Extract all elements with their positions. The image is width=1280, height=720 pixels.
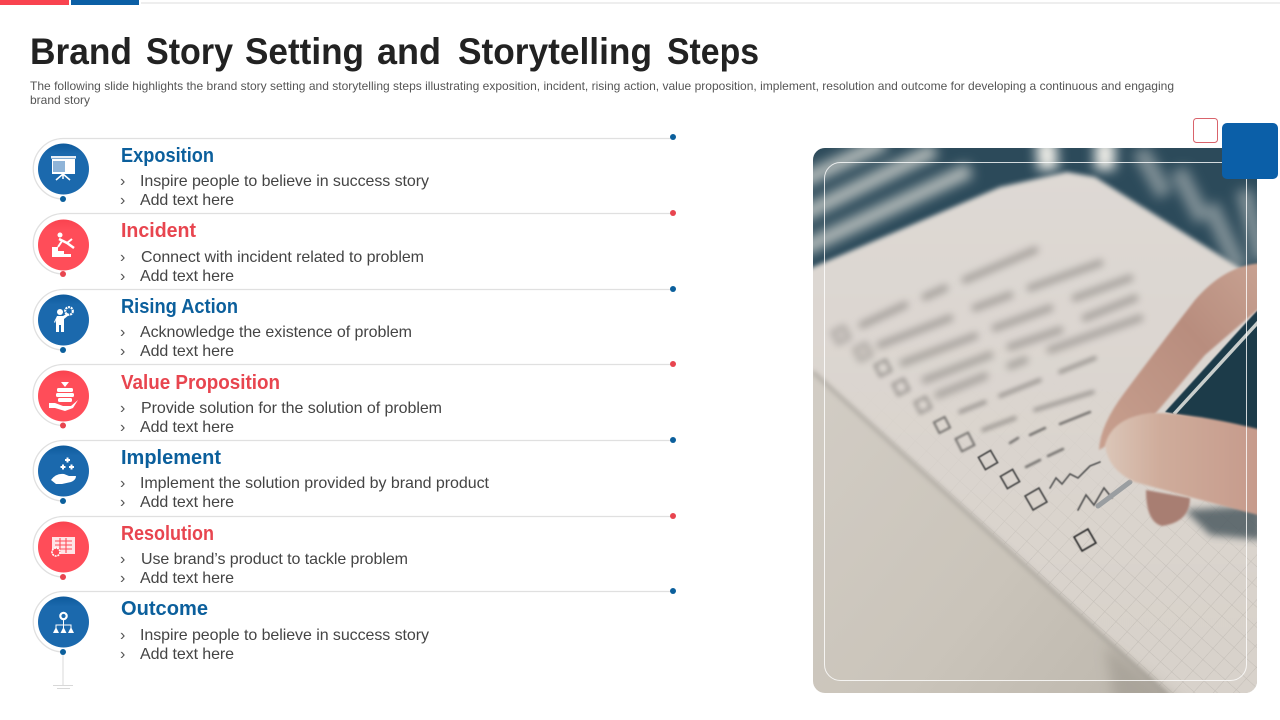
icon: blueprint with gear — [52, 537, 75, 556]
heading: Rising Action: Rising Action — [121, 296, 238, 318]
text: Resolution details: Use brand’s product to tackle problem — [141, 551, 408, 568]
subtitle — [30, 79, 1174, 107]
text: Implement details: Add text here — [140, 494, 234, 511]
icon: organisation chart with gear — [53, 613, 74, 633]
icon: hand with sparkles — [51, 458, 76, 484]
heading: Implement: Implement — [121, 447, 221, 469]
timeline stem base — [53, 655, 73, 688]
text: Outcome details: Add text here — [140, 646, 234, 663]
finger — [1099, 263, 1262, 450]
step 3: Rising Action — [33, 286, 676, 360]
text: Resolution details: › — [120, 551, 125, 568]
text: Rising Action details: Add text here — [140, 343, 234, 360]
title: Brand — [30, 31, 132, 72]
text: Exposition details: › — [120, 173, 125, 190]
title: and — [377, 31, 441, 72]
blurred handwriting — [833, 250, 1140, 551]
step 4: Value Proposition — [33, 361, 676, 436]
text: Incident details — [120, 249, 424, 285]
heading: Value Proposition: Value Proposition — [121, 372, 280, 394]
text: Value Proposition details: Add text here — [140, 419, 234, 436]
step 6: Resolution — [33, 513, 676, 587]
subtitle: brand story — [30, 93, 90, 107]
photo: hand writing a checklist — [813, 148, 1257, 693]
step 7: Outcome — [33, 588, 676, 663]
text: Rising Action details: › — [120, 324, 125, 341]
lower page shadow — [1106, 650, 1176, 693]
heading: Resolution: Resolution — [121, 523, 214, 545]
text: Implement details: › — [120, 494, 125, 511]
title: Storytelling — [458, 31, 652, 72]
text: Value Proposition details — [120, 400, 442, 436]
blurred notebook stripes — [813, 148, 1257, 268]
top accent bar — [0, 0, 1280, 5]
title — [30, 31, 759, 72]
text: Incident details: Add text here — [140, 268, 234, 285]
pen — [1098, 318, 1262, 506]
heading: Exposition: Exposition — [121, 145, 214, 167]
lower finger — [1146, 490, 1190, 526]
title: Setting — [245, 31, 364, 72]
text: Rising Action details: › — [120, 343, 125, 360]
step 2: Incident — [33, 210, 676, 285]
heading: Incident: Incident — [121, 220, 196, 242]
page fold shadow — [813, 372, 1167, 695]
grid — [959, 486, 1257, 693]
icon: falling on stairs — [52, 232, 74, 257]
text: Outcome details: › — [120, 646, 125, 663]
text: Value Proposition details: › — [120, 419, 125, 436]
dark background behind pen — [1165, 305, 1262, 432]
text: Rising Action details — [120, 324, 412, 360]
text: Value Proposition details: › — [120, 400, 125, 417]
text: Implement details: › — [120, 475, 125, 492]
text: Exposition details: Inspire people to believe in success story — [140, 173, 429, 190]
step 1: Exposition — [33, 134, 676, 209]
text: Value Proposition details: Provide solution for the solution of problem — [141, 400, 442, 417]
text: Implement details: Implement the solution provided by brand product — [140, 475, 490, 492]
text: Outcome details: › — [120, 627, 125, 644]
text: Implement details — [120, 475, 490, 511]
heading: Outcome: Outcome — [121, 598, 208, 620]
text: Outcome details — [120, 627, 429, 663]
text: Exposition details: Add text here — [140, 192, 234, 209]
text: Exposition details — [120, 173, 429, 209]
thumb — [1105, 413, 1262, 516]
text: Resolution details: Add text here — [140, 570, 234, 587]
subtitle: The following slide highlights the brand story setting and storytelling steps illustrating exposition, incident, rising action, value proposition, implement, resolution and outcome for developing a continuous and engaging — [30, 79, 1174, 93]
text: Incident details: › — [120, 268, 125, 285]
text: Outcome details: Inspire people to believe in success story — [140, 627, 429, 644]
text: Exposition details: › — [120, 192, 125, 209]
step 5: Implement — [33, 437, 676, 511]
text: Rising Action details: Acknowledge the existence of problem — [140, 324, 412, 341]
text: Incident details: › — [120, 249, 125, 266]
text: Incident details: Connect with incident related to problem — [141, 249, 424, 266]
title: Steps — [667, 31, 759, 72]
photo frame outline — [824, 162, 1246, 680]
title: Story — [146, 31, 233, 72]
icon: presentation board — [51, 156, 76, 180]
icon: hand with stacked boxes — [49, 382, 78, 411]
notebook page — [813, 168, 1257, 693]
icon: person with gear — [54, 307, 73, 332]
decorative blue square — [1222, 123, 1278, 179]
decorative red outline square — [1194, 118, 1218, 142]
text: Resolution details: › — [120, 570, 125, 587]
text: Resolution details — [120, 551, 408, 587]
